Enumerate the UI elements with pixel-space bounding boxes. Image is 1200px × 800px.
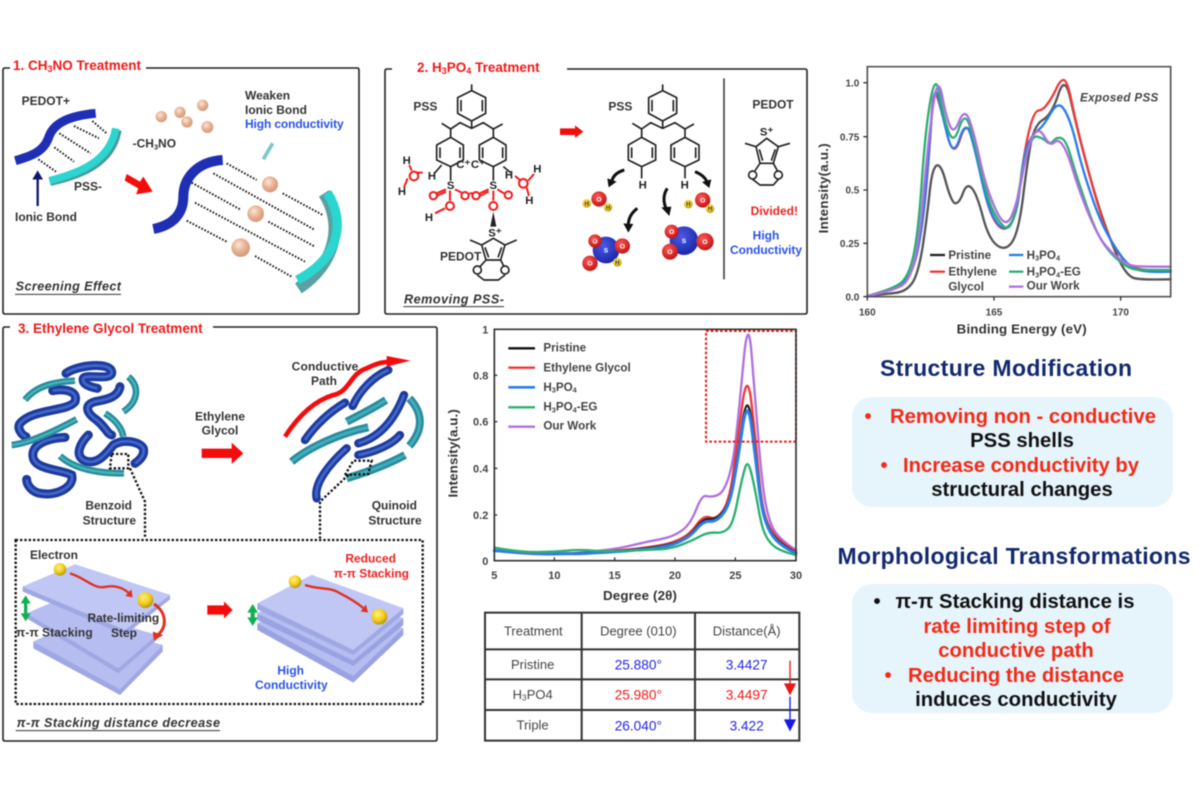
PSS after treatment bbox=[628, 84, 699, 178]
XRD axis ticks and numbers: 0.4 bbox=[473, 463, 489, 475]
loose stacked plates bbox=[23, 564, 170, 695]
XRD axis ticks and numbers: 5 bbox=[491, 570, 497, 582]
panel: CH3NO treatment bbox=[3, 58, 359, 314]
water and sulfate molecules: H bbox=[708, 207, 712, 213]
water and sulfate molecules: O bbox=[596, 196, 602, 203]
atom labels: C⁺ bbox=[456, 159, 470, 171]
XPS axis ticks and numbers: 0.0 bbox=[845, 292, 860, 303]
curved reaction arrows bbox=[607, 170, 711, 233]
benzoid tangled chains bbox=[12, 365, 144, 494]
atom labels: H bbox=[425, 212, 433, 224]
XRD axis ticks and numbers: 0 bbox=[482, 556, 488, 568]
arrow: ionic bond bbox=[34, 173, 41, 206]
XRD curves bbox=[494, 335, 796, 555]
table: stacking distance bbox=[485, 613, 799, 741]
XRD legend: 3 bbox=[552, 405, 556, 414]
XPS curves bbox=[867, 80, 1171, 296]
panel 3 labels: π-π Stacking bbox=[16, 625, 93, 639]
water and sulfate molecules: H bbox=[585, 201, 589, 207]
heading: morphological transformations: Morphological Transformations bbox=[838, 543, 1190, 569]
divider bbox=[721, 78, 726, 279]
callout: morphological transformations: • bbox=[884, 665, 892, 687]
CH3NO molecules bbox=[156, 100, 278, 257]
atom labels: H bbox=[398, 186, 406, 198]
XRD axis ticks and numbers: 0.2 bbox=[473, 510, 488, 522]
atom labels: S bbox=[490, 180, 498, 192]
arrow: conductive path bbox=[285, 356, 411, 437]
panel 3 labels: High bbox=[277, 663, 304, 677]
panel 1 labels: PSS- bbox=[74, 179, 102, 193]
panel 3 labels: π-π Stacking distance decrease bbox=[17, 716, 220, 730]
panel 2 labels: High bbox=[753, 228, 779, 242]
quinoid aligned chains bbox=[292, 370, 420, 498]
XRD legend: 3 bbox=[552, 386, 556, 395]
panel 2 labels: H bbox=[681, 179, 689, 191]
panel: ethylene glycol treatment bbox=[3, 321, 437, 741]
zoom connectors bbox=[110, 454, 372, 538]
callout: morphological transformations: • bbox=[873, 591, 881, 613]
panel 3 title: 3. Ethylene Glycol Treatment bbox=[18, 321, 203, 336]
arrow: inset red bbox=[207, 601, 233, 619]
panel 3 labels: Glycol bbox=[202, 424, 238, 438]
table row: H3PO4: PO4 bbox=[527, 687, 553, 702]
water and sulfate molecules: S bbox=[604, 247, 609, 254]
XPS legend: H bbox=[1027, 249, 1035, 262]
PSS with sulfonate structure bbox=[435, 84, 517, 280]
XRD legend: 4 bbox=[573, 386, 578, 395]
callout: structure modification: • bbox=[864, 406, 872, 428]
water and sulfate molecules: O bbox=[667, 249, 673, 256]
table row: H3PO4: 3 bbox=[522, 693, 527, 703]
panel 2 frame bbox=[385, 69, 807, 314]
water and sulfate molecules: O bbox=[620, 243, 625, 250]
callout: structure modification: Increase conductivity by bbox=[903, 455, 1140, 477]
atom labels: S bbox=[447, 180, 455, 192]
XPS legend: H bbox=[1027, 266, 1035, 279]
panel 2 title: 2. H bbox=[417, 60, 442, 75]
panel 3 labels: Step bbox=[111, 626, 137, 640]
panel 2 title: 4 bbox=[466, 66, 471, 76]
callout: morphological transformations: conductive path bbox=[938, 640, 1094, 662]
XPS annotation: Exposed PSS bbox=[1080, 92, 1159, 105]
zoom inset box bbox=[16, 540, 423, 704]
water and sulfate molecules: H bbox=[615, 260, 619, 266]
arrow: red transition bbox=[125, 174, 153, 194]
water and sulfate molecules: O bbox=[702, 239, 708, 246]
XRD legend bbox=[508, 342, 631, 433]
water and sulfate molecules: S bbox=[682, 238, 687, 245]
table grid bbox=[485, 613, 799, 741]
panel 2 labels bbox=[403, 98, 802, 307]
arrow: red bbox=[560, 125, 583, 138]
XPS axis ticks and numbers bbox=[840, 78, 1129, 318]
table row: pristine: Pristine bbox=[511, 657, 554, 672]
panel 2 title: 3 bbox=[442, 66, 447, 76]
XRD legend: Pristine bbox=[543, 342, 587, 355]
XPS axis ticks and numbers: 1.0 bbox=[845, 78, 860, 89]
atom labels: H bbox=[533, 164, 541, 176]
panel 1 labels: Ionic Bond bbox=[245, 103, 307, 117]
callout: structure modification bbox=[852, 397, 1173, 507]
panel 3 labels: Quinoid bbox=[372, 499, 417, 513]
panel 3 labels: Benzoid bbox=[85, 499, 132, 513]
arrow: distance increase bbox=[785, 661, 795, 694]
callout: structure modification: Removing non - conductive bbox=[890, 406, 1156, 428]
panel 1 labels: High conductivity bbox=[245, 117, 344, 131]
XRD axis titles bbox=[445, 409, 677, 603]
chart: XPS binding energy bbox=[816, 67, 1171, 336]
electron transport arrows bbox=[70, 573, 368, 641]
atom labels: H bbox=[403, 155, 411, 167]
XPS legend: Pristine bbox=[948, 249, 992, 262]
table row: triple bbox=[517, 718, 764, 733]
panel 2 labels: Removing PSS- bbox=[404, 292, 504, 306]
XPS axis titles: Intensity(a.u.) bbox=[816, 143, 831, 233]
panel 2 labels: PSS bbox=[413, 100, 437, 114]
table header bbox=[504, 623, 781, 638]
XRD plot frame bbox=[494, 329, 796, 561]
atom labels: H bbox=[525, 195, 533, 207]
XPS axis ticks and numbers: 160 bbox=[859, 307, 876, 318]
atom labels: H bbox=[505, 169, 513, 181]
panel 2 title: PO bbox=[447, 60, 466, 75]
compact stacked plates bbox=[257, 575, 403, 683]
water and sulfate molecules: O bbox=[592, 238, 598, 245]
arrow: distance decrease bbox=[785, 697, 795, 730]
table row: H3PO4: 3.4497 bbox=[726, 688, 768, 703]
ionic bond dotted lines bbox=[38, 121, 323, 277]
table row: H3PO4: H bbox=[513, 687, 522, 702]
XRD legend: PO bbox=[556, 401, 573, 414]
arrow: ethylene glycol bbox=[202, 443, 243, 464]
table row: pristine bbox=[511, 657, 768, 673]
panel 3 labels: Electron bbox=[30, 548, 78, 562]
callout: morphological transformations: Reducing the distance bbox=[908, 665, 1124, 687]
XPS axis ticks and numbers: 0.5 bbox=[845, 186, 860, 197]
XRD axis ticks and numbers: 1 bbox=[482, 324, 488, 336]
panel 3 labels: π-π Stacking bbox=[334, 567, 409, 581]
panel 3 labels: Ethylene bbox=[195, 409, 245, 423]
coordination wedge bbox=[490, 212, 496, 227]
atom labels: S⁺ bbox=[488, 228, 502, 240]
panel 1 frame bbox=[3, 68, 359, 314]
table row: H3PO4: 25.980° bbox=[615, 688, 662, 703]
water and sulfate molecules: H bbox=[606, 205, 610, 211]
panel 3 labels: Structure bbox=[83, 513, 136, 527]
table row: triple: 3.422 bbox=[730, 718, 764, 733]
removing PSS chemistry diagram bbox=[398, 78, 802, 307]
XPS axis ticks and numbers: 170 bbox=[1112, 307, 1129, 318]
XRD axis titles: Degree (2θ) bbox=[603, 588, 677, 603]
red sulfonate bonds bbox=[404, 165, 534, 213]
green double arrows bbox=[21, 595, 258, 626]
table row: pristine: 3.4427 bbox=[726, 658, 768, 673]
PSS- chain, small bbox=[49, 128, 117, 182]
screening effect diagram bbox=[15, 88, 344, 294]
XPS legend: 4 bbox=[1056, 254, 1061, 263]
callout: structure modification: PSS shells bbox=[970, 430, 1074, 452]
XPS legend: 4 bbox=[1056, 270, 1061, 279]
panel 1 labels: -CH bbox=[133, 137, 154, 151]
XPS legend: 3 bbox=[1035, 270, 1039, 279]
XRD legend: Ethylene Glycol bbox=[543, 361, 631, 374]
XPS legend: Ethylene bbox=[948, 266, 997, 279]
panel 2 labels: Conductivity bbox=[730, 243, 802, 257]
panel 1 labels: NO bbox=[158, 137, 176, 151]
panel 3 labels: Reduced bbox=[345, 552, 396, 566]
panel: H3PO4 treatment bbox=[385, 60, 807, 314]
atom labels: H bbox=[428, 170, 436, 182]
XPS plot frame bbox=[867, 67, 1171, 297]
XRD axis ticks and numbers: 20 bbox=[669, 570, 681, 582]
XRD legend: H bbox=[543, 401, 552, 414]
atom labels bbox=[398, 155, 541, 274]
callout: morphological transformations: induces conductivity bbox=[915, 689, 1118, 711]
panel 3 labels: Rate-limiting bbox=[87, 611, 159, 625]
PSS- chain, stretched bbox=[297, 193, 337, 288]
table row: triple: 26.040° bbox=[615, 718, 662, 733]
XPS legend: -EG bbox=[1060, 266, 1081, 279]
XRD legend: H bbox=[543, 381, 552, 394]
water and sulfate molecules: O bbox=[700, 197, 705, 204]
PEDOT+ chain, small bbox=[15, 113, 96, 161]
arrow: teal pointer bbox=[263, 143, 273, 159]
XPS legend: Glycol bbox=[948, 281, 984, 294]
XPS legend: 3 bbox=[1035, 254, 1039, 263]
panel 3 labels: Path bbox=[311, 374, 337, 388]
electrons bbox=[54, 563, 387, 625]
water and sulfate molecules: H bbox=[686, 202, 690, 208]
XRD axis ticks and numbers bbox=[473, 324, 802, 582]
panel 3 labels: Conductivity bbox=[255, 678, 328, 692]
XPS axis ticks and numbers: 165 bbox=[986, 307, 1003, 318]
callout: morphological transformations bbox=[852, 584, 1173, 713]
XRD axis titles: Intensity(a.u.) bbox=[445, 409, 460, 497]
XRD axis ticks and numbers: 0.8 bbox=[473, 370, 488, 382]
panel 1 labels: PEDOT+ bbox=[22, 94, 70, 108]
panel 1 title: 1. CH bbox=[13, 58, 48, 73]
table row: triple: Triple bbox=[517, 718, 549, 733]
panel 1 labels: Ionic Bond bbox=[15, 210, 77, 224]
panel 1 labels: Screening Effect bbox=[16, 280, 122, 294]
XPS axis ticks and numbers: 0.75 bbox=[840, 132, 860, 143]
table header: Degree (010) bbox=[600, 623, 677, 638]
callout: morphological transformations: π-π Stacking distance is bbox=[896, 591, 1134, 613]
callout: structure modification: • bbox=[880, 455, 888, 477]
panel 2 labels: PEDOT bbox=[440, 249, 482, 263]
panel 2 title: Treatment bbox=[471, 60, 540, 75]
water and sulfate molecules bbox=[582, 191, 714, 271]
table row: pristine: 25.880° bbox=[615, 658, 662, 673]
XPS legend bbox=[930, 249, 1081, 294]
XRD highlight box bbox=[706, 331, 796, 442]
atom labels: C⁺ bbox=[471, 159, 485, 171]
table row: H3PO4 bbox=[513, 687, 768, 703]
panel 3 labels bbox=[16, 360, 422, 731]
XPS axis ticks and numbers: 0.25 bbox=[840, 239, 860, 250]
panel 2 labels: H bbox=[639, 179, 647, 191]
XRD axis ticks and numbers: 0.6 bbox=[473, 417, 488, 429]
panel 1 labels bbox=[15, 88, 344, 294]
panel 2 labels: S⁺ bbox=[760, 127, 773, 139]
panel 1 title: 3 bbox=[48, 64, 53, 74]
XRD legend: Our Work bbox=[543, 420, 597, 433]
callout: structure modification: structural changes bbox=[931, 479, 1113, 501]
panel 2 labels: PEDOT bbox=[752, 98, 794, 112]
PEDOT divided structure bbox=[745, 138, 790, 185]
XRD axis ticks and numbers: 25 bbox=[729, 570, 741, 582]
XRD legend: PO bbox=[556, 381, 573, 394]
panel 2 labels: Divided! bbox=[751, 204, 798, 218]
XRD legend: -EG bbox=[577, 401, 597, 414]
XPS legend: PO bbox=[1039, 266, 1056, 279]
panel 1 labels: Weaken bbox=[245, 88, 290, 102]
callout: morphological transformations: rate limiting step of bbox=[923, 616, 1111, 638]
water and sulfate molecules: O bbox=[587, 261, 593, 268]
panel 3 labels: Structure bbox=[368, 513, 422, 527]
XPS legend: Our Work bbox=[1027, 280, 1080, 293]
XRD axis ticks and numbers: 30 bbox=[790, 570, 802, 582]
panel 3 frame bbox=[3, 327, 437, 741]
XRD axis ticks and numbers: 15 bbox=[609, 570, 621, 582]
XPS axis titles bbox=[816, 143, 1087, 336]
heading: structure modification: Structure Modification bbox=[880, 355, 1132, 381]
panel 1 labels: 3 bbox=[154, 143, 158, 152]
water and sulfate molecules: O bbox=[669, 229, 674, 236]
XRD axis ticks and numbers: 10 bbox=[548, 570, 560, 582]
chart: XRD intensity bbox=[445, 324, 802, 603]
conductive morphology diagram bbox=[12, 356, 423, 731]
table header: Distance(Å) bbox=[713, 623, 781, 638]
XPS axis titles: Binding Energy (eV) bbox=[957, 321, 1087, 336]
table header: Treatment bbox=[504, 623, 563, 638]
panel 3 labels: Conductive bbox=[292, 360, 359, 374]
XRD legend: 4 bbox=[573, 405, 578, 414]
XPS legend: PO bbox=[1039, 249, 1056, 262]
PEDOT+ chain, stretched bbox=[153, 160, 223, 229]
panel 1 title: NO Treatment bbox=[53, 58, 142, 73]
panel 2 labels: PSS bbox=[608, 100, 632, 114]
